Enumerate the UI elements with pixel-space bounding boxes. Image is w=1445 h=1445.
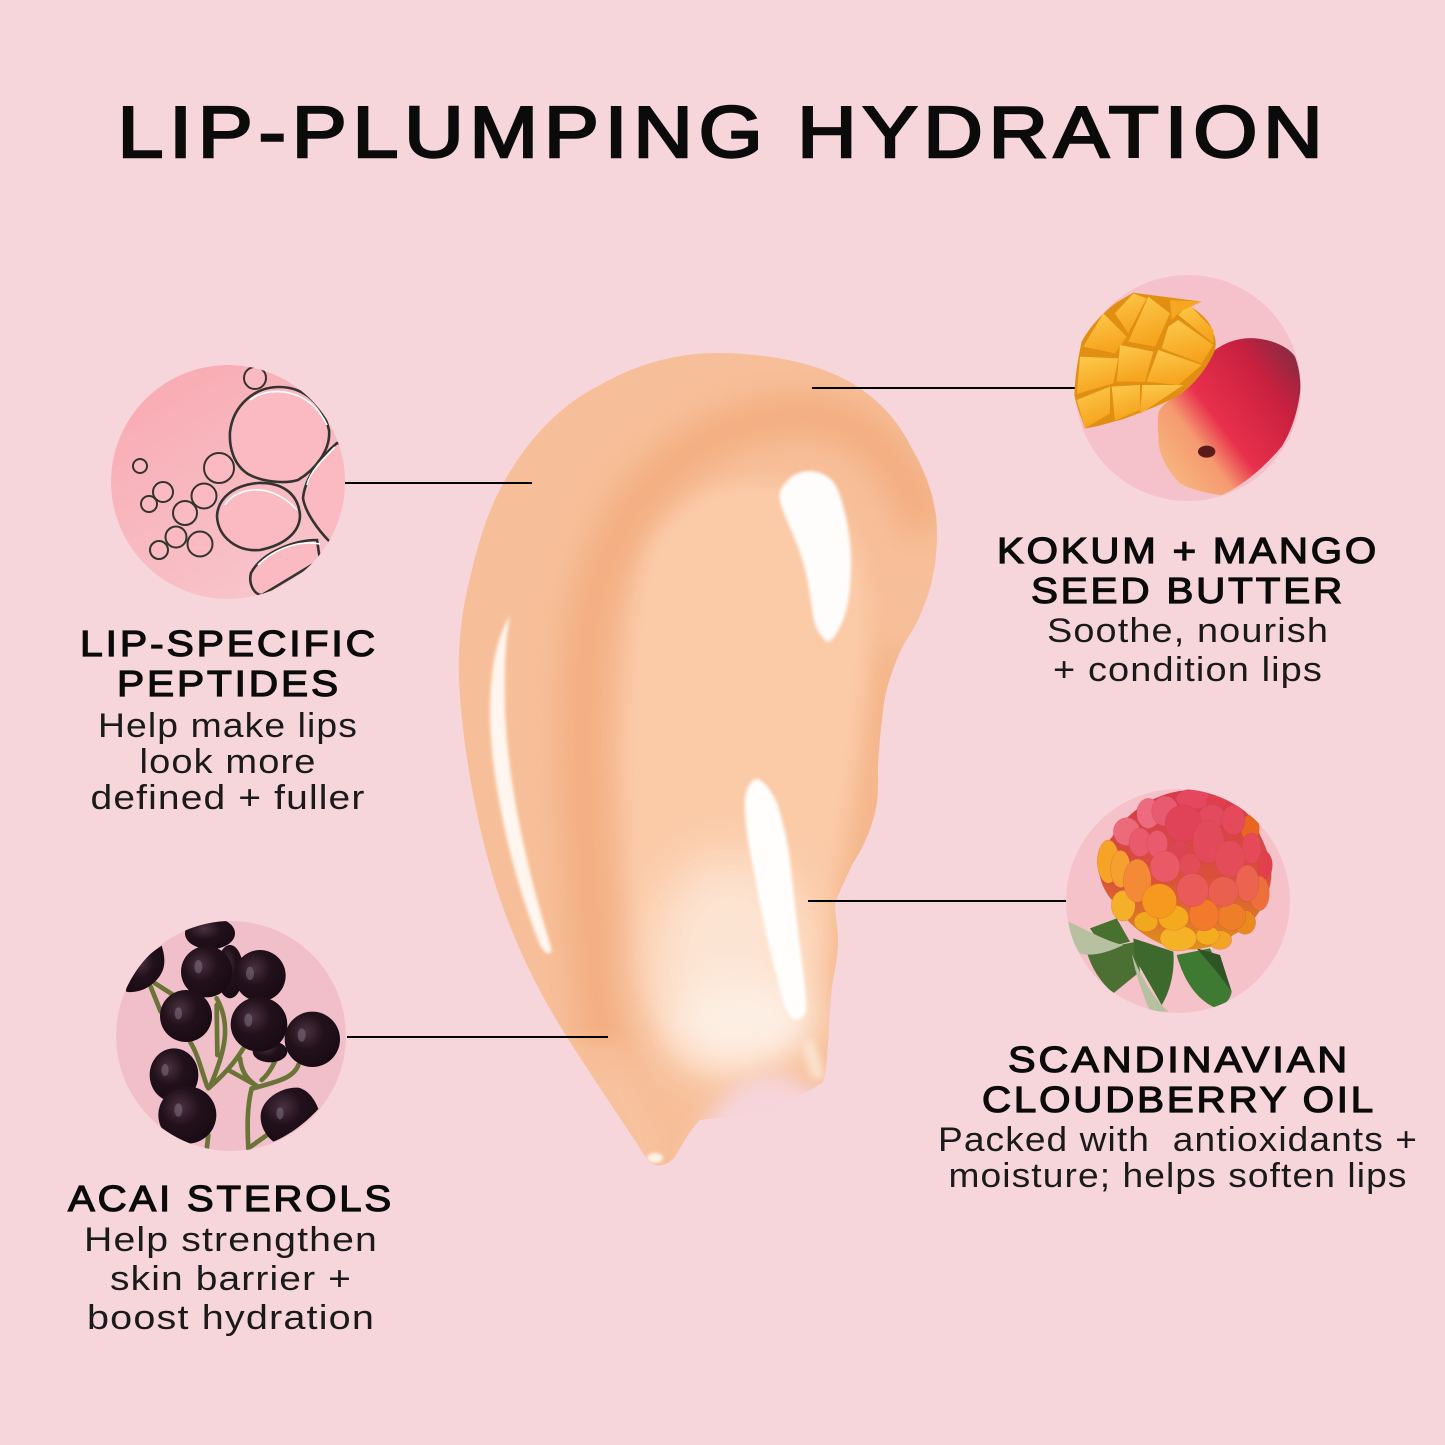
heading: CLOUDBERRY OIL	[982, 1079, 1376, 1120]
description: defined + fuller	[90, 779, 366, 817]
leaves	[1087, 942, 1140, 993]
fruit base	[1099, 790, 1271, 950]
description	[938, 1121, 1418, 1195]
text block: kokum + mango seed butter	[997, 530, 1379, 689]
text block: acai sterols	[68, 1178, 394, 1337]
heading: SCANDINAVIAN	[1008, 1039, 1350, 1080]
connector lines	[345, 388, 1076, 1037]
description: look more	[140, 743, 316, 781]
title: LIP-PLUMPING HYDRATION	[118, 93, 1328, 173]
heading: PEPTIDES	[117, 663, 341, 704]
icon: peptide bubbles	[111, 365, 350, 599]
heading: KOKUM + MANGO	[997, 530, 1379, 571]
description: + condition lips	[1053, 651, 1323, 689]
heading: SEED BUTTER	[1031, 570, 1345, 611]
description	[84, 1221, 378, 1337]
description: boost hydration	[87, 1299, 375, 1337]
description: Help strengthen	[84, 1221, 378, 1259]
heading: LIP-SPECIFIC	[80, 623, 378, 664]
heading: ACAI STEROLS	[68, 1178, 394, 1219]
product swatch: peach gloss smear	[458, 353, 937, 1166]
heading	[997, 530, 1379, 611]
description: moisture; helps soften lips	[948, 1157, 1408, 1195]
highlight: lower streak	[745, 779, 806, 1019]
description: Help make lips	[98, 707, 358, 745]
description: skin barrier +	[110, 1260, 352, 1298]
highlight: left streak	[490, 616, 551, 954]
heading	[982, 1039, 1376, 1120]
text block: lip-specific peptides	[80, 623, 378, 817]
icon: cloudberry	[1066, 789, 1290, 1013]
fruit drupelets	[1097, 789, 1272, 951]
text block: scandinavian cloudberry oil	[938, 1039, 1418, 1195]
highlight: upper right	[780, 471, 851, 642]
mango body	[1158, 338, 1300, 495]
heading	[80, 623, 378, 704]
description: Packed with antioxidants +	[938, 1121, 1418, 1159]
icon: kokum and mango	[1074, 275, 1301, 501]
description	[90, 707, 366, 817]
description: Soothe, nourish	[1047, 612, 1329, 650]
description	[1047, 612, 1329, 689]
icon: acai berries	[116, 917, 346, 1151]
mango half	[1074, 293, 1216, 428]
